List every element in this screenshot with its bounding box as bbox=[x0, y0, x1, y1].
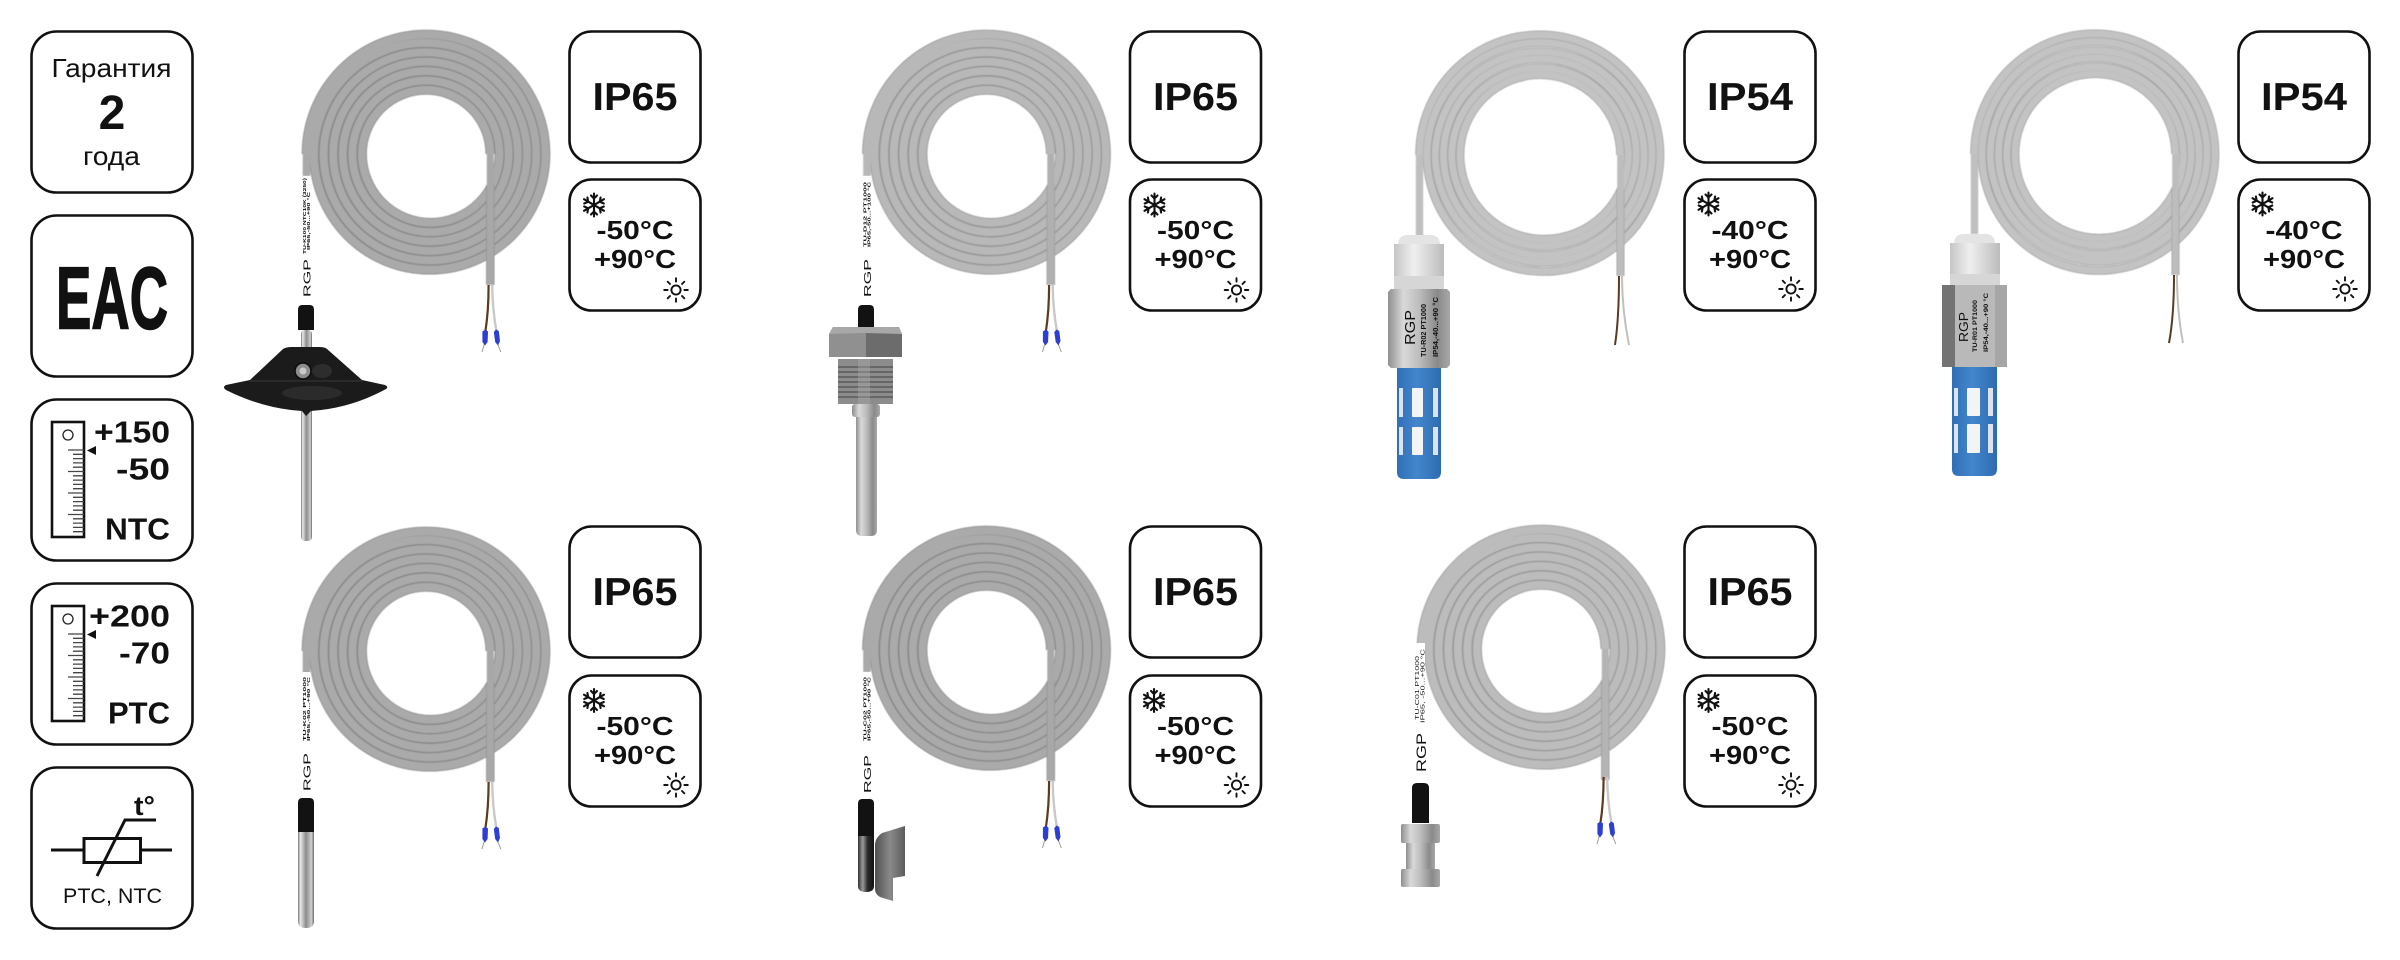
black sleeve bbox=[298, 798, 314, 832]
badge: temperature range probe 2: +90°C bbox=[1154, 244, 1237, 274]
badge: temperature range probe 4 bbox=[2238, 180, 2370, 310]
badge: temperature range probe 6: +90°C bbox=[1154, 740, 1237, 770]
badge: temperature range probe 7: -50°C bbox=[1712, 711, 1789, 741]
panel: EAC certification badge: EAC bbox=[56, 248, 168, 348]
badge: temperature range probe 2 bbox=[1130, 180, 1261, 310]
badge: IP65 probe 7 bbox=[1684, 526, 1816, 658]
panel: PTC temperature range bbox=[32, 584, 192, 744]
metal tube bbox=[298, 832, 314, 928]
badge: IP65 probe 2: IP65 bbox=[1153, 76, 1238, 119]
probe 1: duct sensor with black flange bbox=[224, 34, 546, 541]
steel bullet tip bbox=[1401, 824, 1440, 887]
probe 6: pipe-clip sensor bbox=[858, 530, 1106, 901]
panel: NTC temperature range bbox=[32, 400, 192, 560]
hex nut bbox=[829, 327, 902, 357]
panel: EAC certification badge bbox=[32, 216, 192, 376]
badge: IP65 probe 5: IP65 bbox=[592, 571, 678, 614]
cable label: IP65, -50...+90 °C bbox=[1420, 649, 1426, 723]
spring clip bbox=[875, 826, 905, 901]
panel: thermistor symbol: t° bbox=[134, 791, 155, 821]
panel: PTC temperature range: +200 bbox=[89, 598, 170, 634]
badge: temperature range probe 3 bbox=[1684, 180, 1816, 310]
cable label bbox=[862, 672, 874, 799]
cable coil bbox=[1974, 34, 2215, 275]
cable wires bbox=[1615, 276, 1619, 345]
cable label: IP65,-50...+90 °C bbox=[306, 676, 312, 741]
badge: IP65 probe 5 bbox=[570, 526, 700, 658]
badge: temperature range probe 4: -40°C bbox=[2266, 215, 2343, 245]
steel sleeve with marking bbox=[1388, 289, 1450, 368]
panel: NTC temperature range: -50 bbox=[116, 452, 170, 486]
neck bbox=[852, 404, 880, 417]
hex steel body with marking: TU-R01 PT1000 bbox=[1972, 300, 1979, 352]
badge: IP65 probe 2 bbox=[1130, 32, 1261, 162]
cable gland bbox=[1394, 235, 1444, 289]
badge: temperature range probe 5 bbox=[570, 676, 700, 806]
cable label bbox=[862, 176, 874, 304]
badge: temperature range probe 1 bbox=[570, 180, 700, 310]
badge: temperature range probe 1: -50°C bbox=[596, 215, 674, 245]
badge: temperature range probe 6: -50°C bbox=[1157, 711, 1234, 741]
blue filter cap bbox=[1952, 367, 1997, 476]
probe 7: compact bullet sensor bbox=[1401, 530, 1660, 887]
threaded section bbox=[838, 359, 893, 404]
cable label bbox=[1413, 643, 1429, 783]
black sleeve bbox=[1412, 783, 1429, 823]
badge: temperature range probe 7 bbox=[1684, 676, 1816, 806]
steel sleeve with marking: RGP bbox=[1402, 310, 1419, 345]
panel: PTC temperature range: PTC bbox=[108, 696, 170, 730]
cable label: TU-K100 NTC10K (3250) bbox=[302, 177, 308, 254]
steel sleeve with marking: TU-R02 PT1000 bbox=[1421, 304, 1428, 357]
panel: warranty badge: Гарантия bbox=[52, 53, 172, 83]
badge: IP54 probe 3: IP54 bbox=[1707, 76, 1793, 119]
black sleeve bbox=[298, 305, 314, 330]
cable label: RGP bbox=[1413, 733, 1429, 772]
badge: temperature range probe 5: +90°C bbox=[594, 740, 676, 770]
badge: IP54 probe 4: IP54 bbox=[2261, 76, 2347, 119]
cable wires with ferrules bbox=[1042, 781, 1061, 848]
panel: warranty badge bbox=[32, 32, 192, 192]
badge: temperature range probe 7: +90°C bbox=[1709, 740, 1791, 770]
panel: thermistor symbol bbox=[32, 768, 192, 928]
panel: warranty badge: года bbox=[83, 141, 141, 171]
cable label: RGP bbox=[302, 753, 314, 791]
cable coil bbox=[1422, 530, 1660, 780]
cable label: IP65,-50...+100 °C bbox=[866, 181, 872, 247]
badge: IP65 probe 1: IP65 bbox=[592, 76, 678, 119]
cable wires with ferrules bbox=[482, 285, 501, 352]
cable label: TU-K02 PT1000 bbox=[302, 676, 308, 741]
steel sleeve with marking: IP54,-40...+90 °C bbox=[1432, 297, 1440, 357]
black mounting flange bbox=[224, 347, 387, 416]
cable coil bbox=[867, 530, 1106, 781]
panel: NTC temperature range: NTC bbox=[105, 512, 170, 546]
badge: temperature range probe 3: +90°C bbox=[1709, 244, 1791, 274]
probe 2: threaded immersion sensor bbox=[829, 34, 1106, 536]
cable label: IP65,-50...+90 °C bbox=[866, 676, 872, 741]
badge: IP65 probe 1 bbox=[570, 32, 700, 162]
cable label bbox=[302, 176, 314, 304]
cable coil bbox=[1420, 35, 1660, 276]
badge: temperature range probe 6 bbox=[1130, 676, 1261, 806]
cable wires bbox=[2169, 275, 2174, 343]
cable label: IP65,-50...+90 °C bbox=[306, 191, 312, 250]
cable coil bbox=[306, 34, 546, 285]
badge: IP65 probe 6 bbox=[1130, 526, 1261, 658]
cable label: RGP bbox=[862, 755, 874, 793]
panel: NTC temperature range: +150 bbox=[94, 414, 170, 450]
panel: PTC temperature range: -70 bbox=[119, 636, 170, 670]
black sleeve bbox=[858, 799, 874, 836]
panel: thermistor symbol: PTC, NTC bbox=[63, 885, 162, 908]
dark metal tube bbox=[858, 835, 874, 892]
cable wires with ferrules bbox=[482, 782, 501, 849]
badge: IP65 probe 6: IP65 bbox=[1153, 571, 1238, 614]
cable label: TU-C02 PT1000 bbox=[862, 676, 868, 741]
steel rod bbox=[856, 416, 877, 536]
hex steel body with marking: RGP bbox=[1956, 312, 1971, 342]
badge: temperature range probe 5: -50°C bbox=[596, 711, 674, 741]
cable wires with ferrules bbox=[1597, 777, 1616, 844]
cable label bbox=[302, 672, 314, 798]
hex steel body with marking: IP54,-40...+90 °C bbox=[1982, 293, 1990, 352]
badge: IP65 probe 7: IP65 bbox=[1708, 571, 1792, 614]
cable coil bbox=[306, 532, 546, 782]
probe 5: plain rod sensor bbox=[298, 532, 546, 928]
cable wires with ferrules bbox=[1042, 285, 1061, 352]
badge: temperature range probe 2: -50°C bbox=[1157, 215, 1234, 245]
probe 3: humidity-style sensor with round body bbox=[1388, 35, 1660, 479]
probe rod bbox=[301, 330, 312, 541]
panel: warranty badge: 2 bbox=[99, 87, 125, 140]
probe 4: humidity-style sensor with hex body bbox=[1942, 34, 2215, 476]
cable label: RGP bbox=[302, 259, 314, 297]
badge: temperature range probe 1: +90°C bbox=[594, 244, 676, 274]
badge: temperature range probe 4: +90°C bbox=[2263, 244, 2345, 274]
hex steel body with marking bbox=[1942, 285, 2007, 367]
badge: IP54 probe 4 bbox=[2238, 32, 2370, 162]
cable coil bbox=[867, 34, 1106, 285]
badge: temperature range probe 3: -40°C bbox=[1712, 215, 1789, 245]
blue filter cap bbox=[1397, 368, 1441, 479]
cable gland bbox=[1950, 234, 2000, 286]
cable label: RGP bbox=[862, 259, 874, 297]
badge: IP54 probe 3 bbox=[1684, 32, 1816, 162]
cable label: TU-C01 PT1000 bbox=[1415, 656, 1421, 720]
black sleeve bbox=[858, 305, 874, 327]
cable label: TU-D12 PT1000 bbox=[862, 181, 868, 247]
